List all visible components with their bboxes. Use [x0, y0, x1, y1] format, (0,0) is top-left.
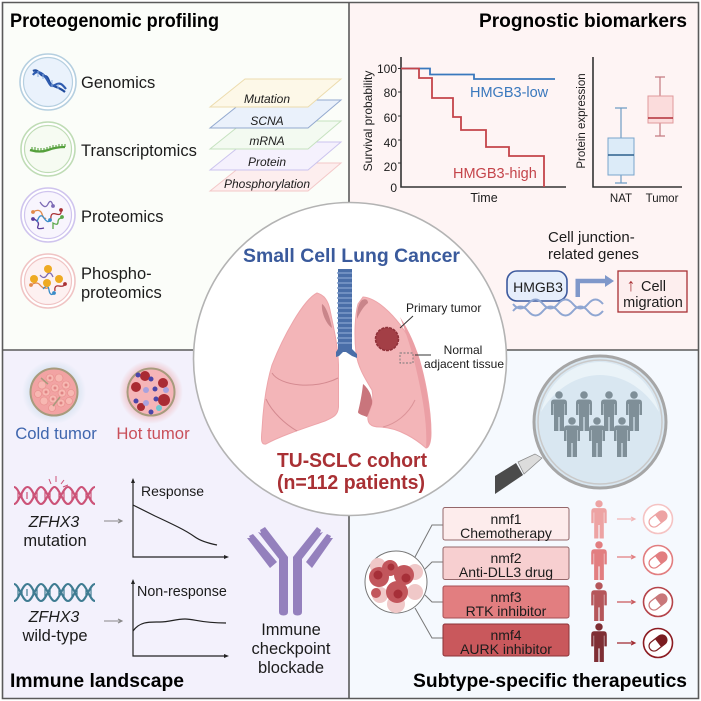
cell migration box: ↑ — [626, 275, 636, 295]
label: Phosphoproteomics: proteomics — [81, 284, 162, 302]
row: nmf1 person, arrow and pill — [591, 500, 672, 538]
icon: transcriptomics — [21, 122, 75, 176]
cell migration box: migration — [623, 295, 683, 311]
layer: SCNA: SCNA — [250, 114, 284, 128]
icon: tumor cell cluster — [365, 525, 443, 638]
cell migration box — [618, 271, 687, 312]
label: TU-SCLC cohort — [277, 450, 427, 494]
heading: Immune landscape: Immune landscape — [10, 671, 184, 692]
primary tumor — [376, 328, 398, 350]
chart: survival curve: 20 — [384, 160, 397, 174]
chart: protein expression box plot: Tumor — [646, 193, 679, 205]
row: nmf4 person, arrow and pill — [591, 623, 672, 662]
chart: protein expression box plot: NAT — [610, 193, 632, 205]
illustration: lungs — [261, 269, 431, 448]
box: nmf2 anti-DLL3 drug — [443, 547, 569, 580]
label: normal adjacent tissue: adjacent tissue — [424, 357, 504, 371]
icon: proteomics — [21, 188, 75, 242]
layer: mutation: Mutation — [244, 92, 290, 106]
panel: tumor types — [15, 360, 190, 443]
arrow: wild-type to non-response — [104, 619, 122, 623]
icon: magnifying glass with cohort — [495, 356, 666, 494]
left lung — [261, 293, 338, 444]
chart: survival curve: 40 — [384, 136, 397, 150]
panel: immune landscape background — [3, 350, 349, 698]
layer: protein: Protein — [248, 155, 286, 169]
icon: phosphoproteomics — [21, 254, 75, 308]
box: nmf4 AURK inhibitor — [443, 624, 569, 657]
chart: response: Response — [141, 483, 204, 499]
HMGB3 box: HMGB3 — [513, 279, 563, 295]
chart: survival curve — [361, 57, 566, 205]
label: ZFHX3 mutation: ZFHX3 — [28, 514, 79, 531]
chart: survival curve: Time — [470, 191, 498, 205]
HMGB3 box — [507, 271, 567, 301]
chart: protein expression box plot: Protein expression — [576, 73, 588, 169]
trachea — [336, 269, 357, 358]
label: immune checkpoint blockade — [252, 621, 331, 677]
diagram: HMGB3 to cell migration — [507, 271, 687, 316]
title: Small Cell Lung Cancer: Small Cell Lung Cancer — [243, 246, 461, 267]
chart: non-response: Non-response — [137, 584, 227, 600]
panel: prognostic biomarkers background — [349, 3, 698, 350]
icon: cold tumor — [22, 360, 86, 424]
label: immune checkpoint blockade: blockade — [258, 659, 324, 677]
chart: survival curve: 100 — [377, 62, 397, 76]
chart: survival curve: 80 — [384, 86, 397, 100]
label: normal adjacent tissue: Normal — [444, 343, 482, 357]
icon: wild-type DNA — [14, 584, 95, 601]
box: nmf1 chemotherapy: Chemotherapy — [460, 525, 552, 541]
omics layer stack — [210, 79, 341, 191]
icon: antibody — [247, 527, 333, 616]
box: nmf2 anti-DLL3 drug: nmf2 — [490, 550, 522, 566]
label: immune checkpoint blockade: Immune — [261, 621, 321, 639]
label: Transcriptomics: Transcriptomics — [81, 142, 197, 160]
heading: Proteogenomic profiling: Proteogenomic profiling — [10, 11, 219, 32]
box: nmf1 chemotherapy — [443, 508, 569, 541]
label: immune checkpoint blockade: checkpoint — [252, 640, 331, 658]
heading: Prognostic biomarkers: Prognostic biomarkers — [479, 11, 687, 32]
chart: non-response — [131, 579, 229, 658]
panel: proteogenomic profiling background — [3, 3, 349, 350]
label: Phosphoproteomics — [81, 265, 162, 302]
chart: protein expression box plot — [576, 57, 682, 205]
chart: survival curve: 60 — [384, 111, 397, 125]
box: nmf3 RTK inhibitor — [443, 586, 569, 619]
label: Genomics: Genomics — [81, 74, 155, 92]
row: nmf3 person, arrow and pill — [591, 582, 672, 621]
chart: survival curve: Survival probability — [361, 71, 375, 171]
label: normal adjacent tissue — [424, 343, 504, 371]
cell migration box: Cell — [641, 279, 666, 295]
chart: response — [131, 478, 229, 559]
label: cold tumor: Cold tumor — [15, 424, 97, 443]
box: nmf3 RTK inhibitor: RTK inhibitor — [466, 603, 547, 619]
chart: survival curve: HMGB3-high — [453, 166, 537, 182]
label: hot tumor: Hot tumor — [116, 424, 190, 443]
label: TU-SCLC cohort: TU-SCLC cohort — [277, 450, 427, 472]
icon: hot tumor — [119, 360, 183, 424]
label: TU-SCLC cohort: (n=112 patients) — [277, 472, 425, 494]
arrow: mutation to response — [104, 519, 122, 523]
box: nmf1 chemotherapy: nmf1 — [490, 511, 522, 527]
label: ZFHX3 mutation: mutation — [23, 532, 87, 550]
label: ZFHX3 wild-type: ZFHX3 — [28, 609, 79, 626]
box: nmf4 AURK inhibitor: AURK inhibitor — [460, 641, 552, 657]
chart: survival curve: 0 — [390, 181, 397, 195]
heading: Subtype-specific therapeutics: Subtype-specific therapeutics — [413, 671, 687, 692]
normal adjacent tissue marker — [400, 353, 413, 363]
icon: mutated DNA — [14, 476, 95, 504]
label: cell junction-related genes — [548, 229, 639, 263]
label: primary tumor: Primary tumor — [406, 301, 481, 315]
label: ZFHX3 wild-type: wild-type — [21, 627, 88, 645]
label: cell junction-related genes: Cell junction- — [548, 229, 635, 246]
label: cell junction-related genes: related genes — [548, 246, 639, 263]
label: Phosphoproteomics: Phospho- — [81, 265, 152, 283]
box: nmf4 AURK inhibitor: nmf4 — [490, 627, 522, 643]
label: Proteomics: Proteomics — [81, 208, 164, 226]
central circle: TU-SCLC cohort — [194, 202, 506, 516]
icon: genomics — [20, 54, 76, 110]
arrow: gene activation — [576, 275, 614, 297]
label: ZFHX3 mutation — [23, 514, 87, 550]
panel: subtype-specific therapeutics background — [349, 350, 698, 698]
chart: survival curve: HMGB3-low — [470, 85, 549, 101]
row: nmf2 person, arrow and pill — [591, 541, 672, 580]
box: nmf2 anti-DLL3 drug: Anti-DLL3 drug — [459, 564, 553, 580]
label: ZFHX3 wild-type — [21, 609, 88, 645]
layer: mRNA: mRNA — [249, 134, 285, 148]
right lung — [355, 297, 431, 448]
box: nmf3 RTK inhibitor: nmf3 — [490, 589, 522, 605]
layer: phosphorylation: Phosphorylation — [224, 177, 310, 191]
